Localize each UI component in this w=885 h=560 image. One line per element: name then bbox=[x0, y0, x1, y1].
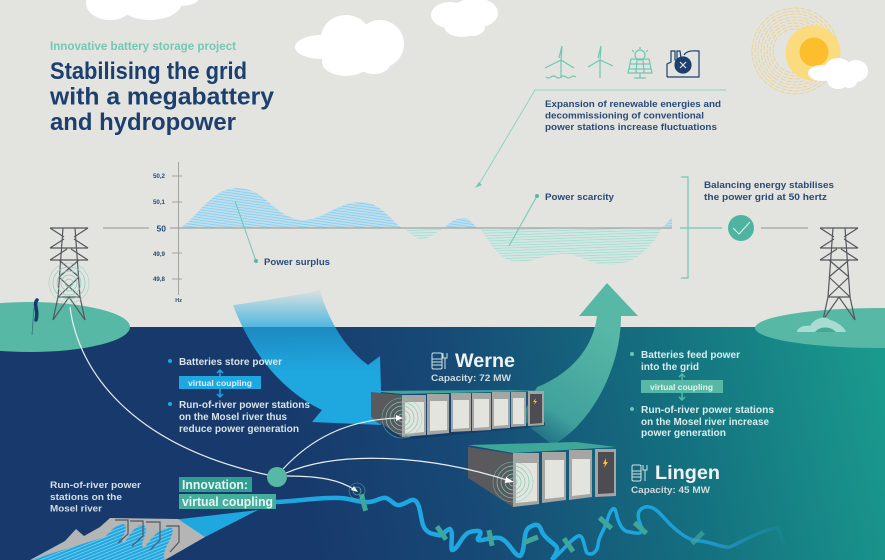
clouds bbox=[86, 0, 498, 76]
chart: power scarcity area bbox=[479, 228, 662, 265]
right text block: on the Mosel river increase bbox=[641, 417, 770, 428]
title bbox=[49, 58, 274, 136]
virtual coupling box: virtual coupling bbox=[188, 378, 252, 388]
battery: Lingen bbox=[468, 442, 616, 507]
dam gates bbox=[115, 520, 179, 552]
battery panels bbox=[513, 449, 616, 507]
rings on batteries bbox=[382, 398, 533, 502]
dam markers on river bbox=[359, 494, 705, 553]
small heading: Innovative battery storage project bbox=[50, 41, 236, 53]
label: Werne: Capacity: 72 MW bbox=[431, 373, 511, 384]
icon: power plant with cross bbox=[667, 51, 699, 77]
title: Stabilising the grid bbox=[50, 58, 247, 85]
right text block: into the grid bbox=[641, 362, 699, 373]
battery side bbox=[468, 447, 513, 507]
chart axis labels: 50,1 bbox=[153, 199, 166, 206]
left text block: Run-of-river power stations bbox=[179, 400, 311, 411]
icon: wind turbine bbox=[588, 46, 613, 78]
grey connector line bbox=[761, 227, 808, 229]
label: power surplus: Power surplus bbox=[264, 257, 330, 268]
virtual coupling connection lines bbox=[70, 307, 514, 499]
left text block: on the Mosel river thus bbox=[179, 412, 288, 423]
left text block bbox=[168, 357, 311, 435]
river inflow funnel bbox=[172, 510, 258, 537]
blue arrow down to batteries bbox=[233, 290, 382, 425]
teal arrow up to grid bbox=[520, 283, 638, 445]
icons: wind turbines, solar panel, power plant bbox=[545, 46, 699, 78]
dam body bbox=[30, 518, 205, 560]
title: with a megabattery bbox=[49, 84, 274, 110]
chart axis labels: Hz bbox=[175, 298, 182, 304]
chart: power surplus area bbox=[179, 188, 402, 228]
chart axis labels: 50,2 bbox=[153, 173, 166, 180]
lightning bbox=[603, 458, 608, 468]
icon: Lingen battery charger bbox=[632, 465, 647, 481]
Mosel label: Mosel river bbox=[50, 504, 102, 514]
Mosel label: Run-of-river power bbox=[50, 480, 141, 491]
expansion callout text bbox=[475, 90, 726, 188]
innovation label: virtual coupling bbox=[182, 495, 273, 509]
balancing text: Balancing energy stabilises bbox=[704, 180, 834, 191]
spillway water bbox=[30, 524, 173, 560]
balancing text bbox=[704, 180, 834, 203]
right text block: Run-of-river power stations bbox=[641, 405, 775, 416]
Mosel label: stations on the bbox=[50, 492, 122, 503]
right text block: power generation bbox=[641, 428, 726, 439]
right text block bbox=[630, 350, 775, 439]
frequency chart bbox=[103, 162, 672, 304]
chart: small surplus bump bbox=[444, 218, 477, 228]
label: Lingen: Capacity: 45 MW bbox=[631, 485, 710, 496]
right pylon bbox=[820, 228, 858, 320]
expansion callout text: Expansion of renewable energies and bbox=[545, 99, 721, 110]
coupling node bbox=[267, 467, 287, 487]
battery top bbox=[371, 390, 544, 394]
expansion callout text: power stations increase fluctuations bbox=[545, 122, 717, 133]
person on left island bbox=[32, 300, 37, 335]
battery panels bbox=[402, 391, 544, 437]
virtual coupling box bbox=[179, 376, 261, 389]
chart axis labels: 49,8 bbox=[153, 276, 166, 283]
icon: offshore wind turbine bbox=[545, 46, 576, 78]
chart axis labels: 50 bbox=[157, 224, 166, 234]
sun bbox=[752, 8, 840, 94]
bush on right island bbox=[797, 318, 846, 332]
balancing text: the power grid at 50 hertz bbox=[704, 192, 827, 203]
chart axis labels bbox=[153, 173, 182, 304]
left pylon bbox=[49, 228, 89, 320]
lightning bbox=[533, 398, 537, 405]
icon: Werne battery charger bbox=[432, 353, 447, 369]
battery: Werne bbox=[371, 390, 545, 440]
virtual coupling box bbox=[641, 380, 723, 393]
label: power scarcity: Power scarcity bbox=[545, 192, 615, 203]
cloud over sun bbox=[808, 58, 868, 89]
chart axis labels: 49,9 bbox=[153, 251, 166, 258]
label: Lingen bbox=[631, 463, 720, 496]
Mosel label bbox=[50, 480, 141, 514]
right text block: Batteries feed power bbox=[641, 350, 740, 361]
left island bbox=[0, 302, 130, 352]
expansion callout text: decommissioning of conventional bbox=[545, 110, 704, 122]
innovation label bbox=[179, 477, 276, 509]
chart: end surplus bump bbox=[662, 218, 672, 228]
water background panel bbox=[0, 327, 885, 560]
label: power surplus bbox=[235, 201, 330, 268]
chart: small scarcity dip bbox=[403, 228, 444, 239]
left text block: Batteries store power bbox=[179, 357, 282, 368]
check mark circle bbox=[728, 215, 754, 241]
hydropower dam bbox=[30, 510, 258, 560]
chart axes bbox=[103, 162, 672, 295]
battery top bbox=[468, 442, 616, 453]
battery side bbox=[371, 392, 402, 437]
virtual coupling box: virtual coupling bbox=[650, 382, 713, 392]
label: Lingen: Lingen bbox=[655, 463, 720, 484]
label: Werne bbox=[431, 351, 515, 384]
label: Werne: Werne bbox=[455, 351, 515, 372]
left text block: reduce power generation bbox=[179, 424, 299, 435]
label: power scarcity bbox=[509, 192, 615, 246]
shadow bbox=[371, 418, 545, 440]
innovation label: Innovation: bbox=[182, 478, 248, 492]
icon: solar panel bbox=[628, 47, 652, 78]
balancing bracket bbox=[680, 177, 722, 278]
title: and hydropower bbox=[50, 109, 236, 136]
right island bbox=[755, 308, 885, 348]
river Mosel bbox=[276, 498, 784, 560]
